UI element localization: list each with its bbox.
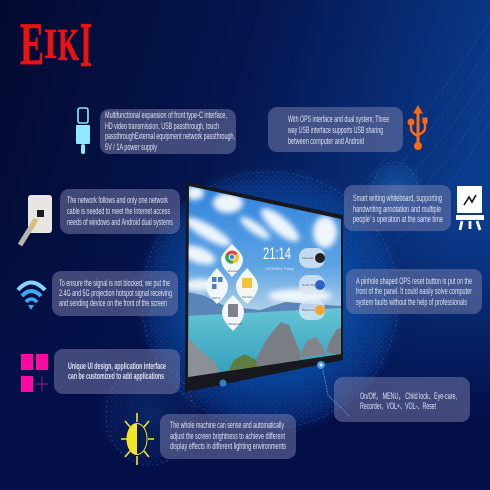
icon: wifi xyxy=(18,282,45,310)
panel: wifi: To ensure the signal is not blocked, we put the xyxy=(59,278,170,288)
panel: USB xyxy=(268,107,403,152)
rocks xyxy=(188,338,220,377)
panel: USB: way USB interface supports USB sharing xyxy=(287,125,383,135)
app tiles xyxy=(206,244,258,331)
logo: EIKI: I xyxy=(44,22,57,68)
icon: whiteboard xyxy=(456,186,484,230)
front panel hotspots xyxy=(220,361,325,386)
app tiles: File Man xyxy=(242,295,253,299)
panel: type-C interface: Multifunctional expansion of front type-C interface, xyxy=(105,110,227,120)
display panel xyxy=(178,180,345,392)
icon: network socket xyxy=(20,195,52,245)
panel: network: needs of windows and Android dual systems xyxy=(67,217,173,227)
panel: type-C interface: HD video transmission, USB passthrough, touch xyxy=(105,121,219,131)
right pills xyxy=(299,248,325,320)
logo: EIKI: K xyxy=(58,20,79,70)
display bezel xyxy=(185,182,343,392)
wallpaper xyxy=(188,186,341,377)
icon: type-C plug xyxy=(76,108,90,154)
panel: UI design: can be customized to add applications xyxy=(68,371,164,381)
panel: network xyxy=(60,189,180,234)
right pills: Smart Box xyxy=(302,283,317,287)
clock: 21:14 xyxy=(263,244,291,263)
clock: 2023/08/11 Friday xyxy=(265,267,294,271)
app tiles: Whiteboard xyxy=(228,322,243,326)
panel: type-C interface xyxy=(100,109,236,154)
panel: brightness: adjust the screen brightness to achieve different xyxy=(170,431,285,441)
panel: whiteboard xyxy=(344,185,451,231)
panel: wifi: 2.4G and 5G projection hotspot signal receiving xyxy=(59,288,172,298)
right pills: Miracast xyxy=(302,256,314,260)
panel: brightness xyxy=(160,414,296,459)
infographic canvas: I xyxy=(80,9,92,80)
panel: UI design: Unique UI design, application interface xyxy=(68,361,166,371)
panel: UI design xyxy=(54,349,180,394)
icon: brightness sun xyxy=(121,413,154,465)
panel: reset button xyxy=(346,269,482,314)
panel: wifi: and sending device on the front of the screen xyxy=(59,298,167,308)
panel: network: The network follows and only one network xyxy=(67,195,168,205)
icon: USB symbol xyxy=(408,106,427,150)
logo: EIKI: E xyxy=(20,11,44,77)
panel: network: cable is needed to meet the Internet access xyxy=(67,206,170,216)
right pills: Welcome xyxy=(302,308,315,312)
logo: EIKI xyxy=(20,9,92,80)
panel: brightness: display effects in different lighting environments xyxy=(170,441,286,451)
app tiles: Browser xyxy=(228,269,238,273)
panel: brightness: The whole machine can sense and automatically xyxy=(170,420,284,430)
panel: USB: With OPS interface and dual system; Three xyxy=(288,114,389,124)
panel: type-C interface: passthroughExternal equipment network passthrough, xyxy=(105,131,235,141)
panel: type-C interface: 5V / 1A power supply xyxy=(105,142,157,152)
panel: USB: between computer and Android xyxy=(288,136,364,146)
clock xyxy=(263,244,294,271)
panel: front buttons xyxy=(334,377,470,422)
app tiles: INPUT xyxy=(212,296,221,300)
panel: wifi xyxy=(52,271,178,316)
icon: app grid xyxy=(21,354,48,392)
